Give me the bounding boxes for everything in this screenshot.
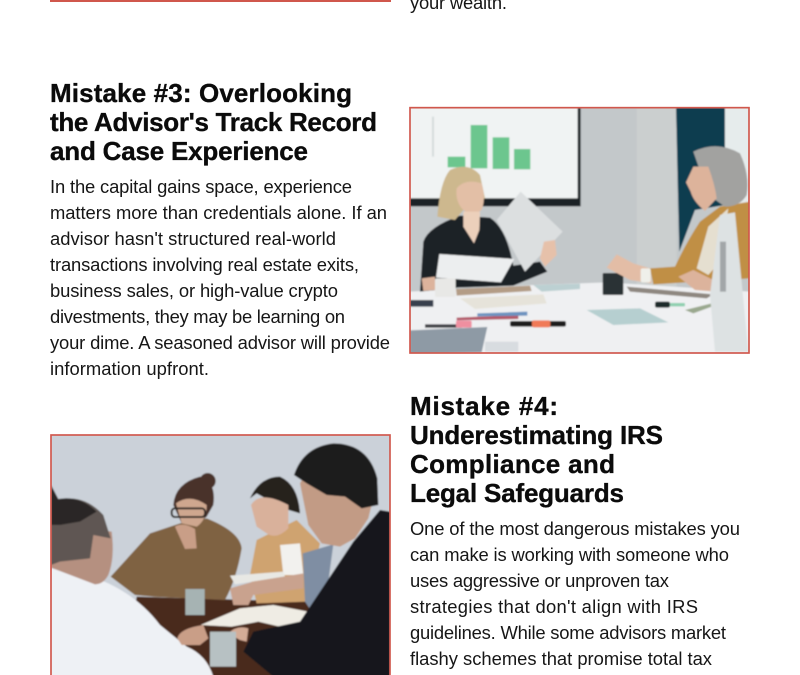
mug and papers [435, 278, 456, 297]
text block: Mistake #4 body [410, 518, 740, 669]
heading: Mistake #3: and Case Experience [50, 136, 308, 166]
text block: Mistake #4 body: guidelines. While some advisors market [410, 622, 726, 643]
photo: two women in a meeting with chart screen [410, 108, 750, 354]
table [410, 282, 750, 354]
text block: Mistake #3 body: information upfront. [50, 358, 209, 379]
heading: Mistake #3: Mistake #3: Overlooking [50, 78, 352, 108]
text block: Mistake #4 body: uses aggressive or unproven tax [410, 570, 669, 591]
heading: Mistake #3 [50, 78, 377, 166]
heading: Mistake #4: Compliance and [410, 449, 615, 479]
heading: Mistake #4: Underestimating IRS [410, 420, 663, 450]
text block: Mistake #3 body: In the capital gains space, experience [50, 176, 352, 197]
heading: Mistake #3: the Advisor's Track Record [50, 107, 377, 137]
text block: Mistake #3 body: advisor hasn't structured real-world [50, 228, 336, 249]
man in black suit [228, 443, 390, 675]
notebook [201, 605, 308, 631]
text block: Mistake #4 body: flashy schemes that promise total tax [410, 648, 712, 669]
image bottom edge from previous section [50, 0, 391, 2]
woman in tan blazer [230, 477, 320, 605]
left woman [420, 167, 563, 292]
pens [510, 321, 566, 327]
heading: Mistake #4: Legal Safeguards [410, 478, 624, 508]
text block: Mistake #3 body [50, 176, 390, 379]
heading: Mistake #4: Mistake #4: [410, 391, 558, 421]
man in white shirt [51, 485, 213, 675]
text block: Mistake #3 body: transactions involving real estate exits, [50, 254, 359, 275]
laptop corner [410, 327, 487, 354]
text block: Mistake #3 body: matters more than credentials alone. If an [50, 202, 387, 223]
text block: Mistake #3 body: divestments, they may be learning on [50, 306, 345, 327]
table [135, 596, 310, 675]
icon: presentation screen with green bars [410, 108, 581, 206]
text block: Mistake #4 body: One of the most dangerous mistakes you [410, 518, 740, 539]
right woman [607, 146, 750, 292]
folder [303, 544, 333, 612]
text block: Mistake #3 body: your dime. A seasoned advisor will provide [50, 332, 390, 353]
heading: Mistake #4 [410, 391, 663, 508]
water bottle [710, 212, 748, 352]
woman in brown blazer [111, 473, 242, 600]
text block: Mistake #4 body: strategies that don't align with IRS [410, 596, 698, 617]
glass front [210, 632, 236, 667]
photo: four colleagues around a table [51, 435, 390, 675]
text block: Mistake #3 body: business sales, or high-value crypto [50, 280, 338, 301]
text block: Mistake #4 body: can make is working with someone who [410, 544, 729, 565]
glass [185, 589, 205, 615]
